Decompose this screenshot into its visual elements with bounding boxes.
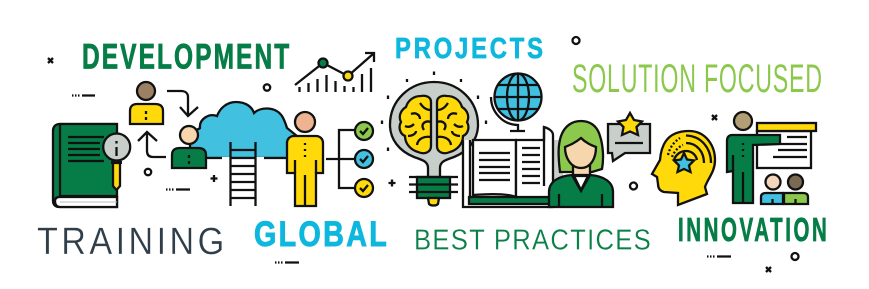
decorative marks xyxy=(48,37,798,272)
icon: cloud xyxy=(190,102,297,158)
diagram: checklist tree xyxy=(326,122,373,197)
icon: audience xyxy=(761,174,808,204)
chart: rising line with bars xyxy=(295,53,374,92)
arrow: bottom left up xyxy=(138,132,166,157)
icon: globe on stand xyxy=(491,74,542,131)
icon: speech bubble with star xyxy=(608,113,650,161)
cloud base masks xyxy=(186,157,298,161)
heading: global: GLOBAL xyxy=(254,214,387,254)
bulb rays xyxy=(382,72,486,151)
icon: presentation board xyxy=(757,123,816,168)
heading: development: DEVELOPMENT xyxy=(82,38,290,77)
icon: open book xyxy=(463,127,563,207)
icon: person green small xyxy=(172,126,206,168)
icon: ladder xyxy=(230,142,256,206)
icon: head with star xyxy=(652,131,715,205)
icon: woman with green hair xyxy=(549,121,613,207)
icon: lightbulb with brain xyxy=(390,82,478,206)
heading: training: TRAINING xyxy=(37,219,224,262)
heading: projects: PROJECTS xyxy=(395,32,543,65)
icon: presenter xyxy=(727,112,780,203)
arrow: top right down xyxy=(167,91,198,116)
heading: best practices: BEST PRACTICES xyxy=(414,223,651,256)
icon: large yellow person xyxy=(287,112,323,206)
icon: person yellow small xyxy=(130,82,163,124)
icon: green book with magnifier xyxy=(53,124,130,207)
heading: solution focused: SOLUTION FOCUSED xyxy=(572,55,822,101)
heading: innovation: INNOVATION xyxy=(678,211,827,248)
